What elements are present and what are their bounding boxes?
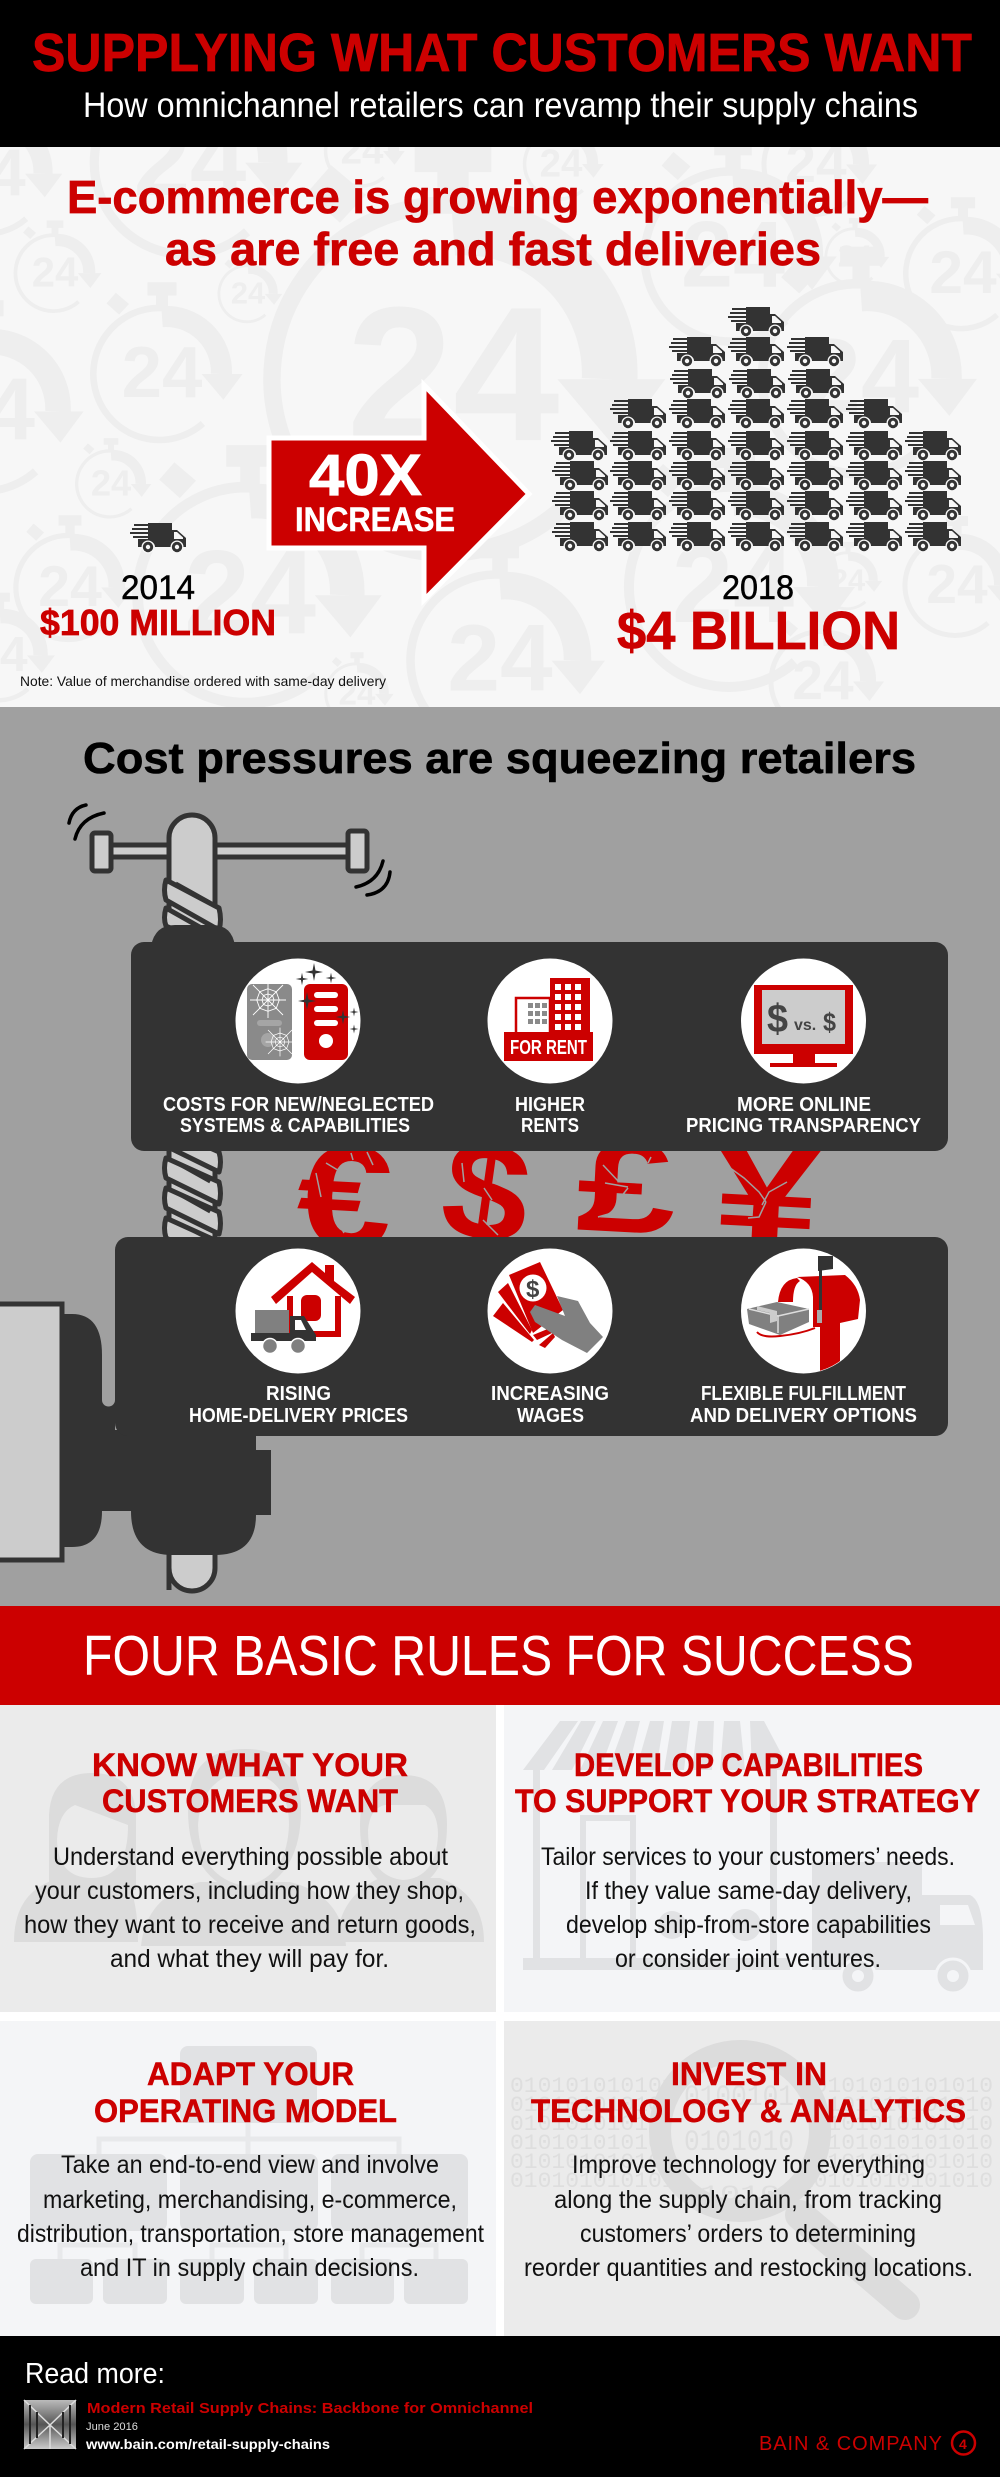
background: binary and magnifier: 01010101010101010101010101010101010 — [510, 2093, 993, 2118]
body: reorder quantities and restocking locations. — [524, 2254, 973, 2282]
icon: crushed currency symbols: ¥ — [709, 1113, 824, 1276]
body: Take an end-to-end view and involve — [61, 2151, 439, 2179]
logo: Bain & Company: BAIN & COMPANY — [759, 2433, 942, 2455]
panel: know your customers — [0, 1705, 496, 2012]
icon: old and new systems — [236, 958, 360, 1084]
background: binary and magnifier — [510, 2051, 993, 2305]
heading: CUSTOMERS WANT — [102, 1783, 398, 1819]
header band — [0, 0, 1000, 147]
arrow: 40X increase: 40X — [309, 443, 422, 508]
background stopwatch pattern: 24 — [122, 332, 202, 413]
labels: PRICING TRANSPARENCY — [686, 1115, 922, 1137]
background stopwatch pattern: 24 — [785, 132, 847, 194]
labels — [163, 1094, 922, 1137]
icon: crushed currency symbols — [297, 1151, 821, 1237]
body — [24, 1843, 476, 1973]
background stopwatch pattern: 24 — [929, 238, 997, 306]
panel: e-commerce growth — [0, 147, 1000, 707]
background stopwatch pattern: 24 — [540, 142, 583, 185]
background stopwatch pattern: 24 — [831, 563, 865, 598]
body: along the supply chain, from tracking — [554, 2186, 942, 2214]
body: your customers, including how they shop, — [35, 1877, 464, 1905]
heading: INVEST IN — [671, 2056, 827, 2092]
labels — [189, 1383, 917, 1427]
heading: KNOW WHAT YOUR — [92, 1747, 408, 1783]
background stopwatch pattern: 24 — [681, 201, 785, 306]
background stopwatch pattern: 24 — [231, 276, 265, 311]
labels: SYSTEMS & CAPABILITIES — [180, 1115, 410, 1137]
icon: price comparison monitor: $ — [767, 997, 788, 1041]
read more: Read more: — [25, 2358, 165, 2390]
background stopwatch pattern: 24 — [347, 267, 559, 481]
labels: MORE ONLINE — [737, 1094, 871, 1116]
icon: wages cash in hand — [488, 1248, 612, 1374]
panel: upper jaw — [131, 942, 948, 1151]
body: and IT in supply chain decisions. — [80, 2254, 419, 2282]
background stopwatch pattern: 24 — [803, 318, 919, 435]
background: storefront and truck — [523, 1721, 983, 1993]
background stopwatch pattern: 24 — [792, 649, 854, 711]
labels: RENTS — [521, 1115, 579, 1137]
heading: TO SUPPORT YOUR STRATEGY — [515, 1783, 980, 1819]
footer — [0, 2336, 1000, 2477]
icon: crushed currency symbols: £ — [573, 1112, 680, 1263]
body: customers’ orders to determining — [580, 2220, 916, 2248]
heading — [67, 171, 928, 275]
icon: wages cash in hand: $ — [526, 1276, 540, 1303]
report reference: www.bain.com/retail-supply-chains — [85, 2436, 330, 2452]
background stopwatch pattern: 24 — [184, 526, 316, 659]
logo: Bain & Company: 4 — [959, 2436, 967, 2452]
background stopwatch pattern: 24 — [672, 523, 794, 646]
body: or consider joint ventures. — [615, 1945, 881, 1973]
thumbnail: warehouse aisle — [24, 2400, 76, 2449]
icon: crushed currency symbols: $ — [433, 1108, 540, 1275]
panel: cost pressures — [0, 707, 1000, 1606]
labels: AND DELIVERY OPTIONS — [690, 1405, 917, 1427]
background: people — [14, 1749, 484, 1946]
background stopwatch pattern: 24 — [134, 104, 246, 217]
vise body — [0, 925, 271, 1560]
heading: E-commerce is growing exponentially— — [67, 171, 928, 223]
icon: price comparison monitor: vs. — [794, 1017, 816, 1034]
2018 value: 2018 — [722, 569, 794, 607]
body — [524, 2151, 973, 2282]
body: Improve technology for everything — [572, 2151, 925, 2179]
body: and what they will pay for. — [110, 1945, 389, 1973]
background: binary and magnifier: 01010101010101010101010101010101010 — [510, 2112, 993, 2137]
labels: FLEXIBLE FULFILLMENT — [701, 1383, 906, 1405]
heading: DEVELOP CAPABILITIES — [574, 1747, 923, 1783]
truck grid 2018 — [551, 307, 961, 552]
labels: RISING — [266, 1383, 331, 1405]
labels: HOME-DELIVERY PRICES — [189, 1405, 408, 1427]
report reference: June 2016 — [86, 2421, 138, 2433]
background: binary and magnifier: 0100101 — [684, 2081, 794, 2115]
icon: price comparison monitor — [741, 958, 866, 1084]
icon: mailbox with parcel — [741, 1248, 866, 1380]
note: Note: Value of merchandise ordered with same-day delivery — [20, 673, 386, 689]
panel: lower jaw — [115, 1237, 948, 1436]
background stopwatch pattern: 24 — [91, 463, 131, 504]
background stopwatch pattern: 24 — [339, 674, 376, 711]
report reference: Modern Retail Supply Chains: Backbone for Omnichannel — [87, 2400, 533, 2417]
background: binary and magnifier: 01010101010101010101010101010101010 — [510, 2074, 993, 2099]
labels: COSTS FOR NEW/NEGLECTED — [163, 1094, 434, 1116]
labels: WAGES — [517, 1405, 584, 1427]
heading: OPERATING MODEL — [94, 2093, 397, 2129]
heading: TECHNOLOGY & ANALYTICS — [531, 2093, 966, 2129]
report reference — [85, 2400, 533, 2452]
background stopwatch pattern: 24 — [341, 129, 384, 172]
heading — [531, 2056, 966, 2129]
body: distribution, transportation, store management — [17, 2220, 484, 2248]
body — [541, 1843, 955, 1973]
background stopwatch pattern: 24 — [38, 555, 102, 619]
background stopwatch pattern: 24 — [32, 248, 79, 295]
heading — [94, 2056, 397, 2129]
labels: INCREASING — [491, 1383, 609, 1405]
heading: ADAPT YOUR — [147, 2056, 354, 2092]
rules banner — [0, 1606, 1000, 1705]
labels: HIGHER — [515, 1094, 585, 1116]
heading: as are free and fast deliveries — [165, 223, 821, 275]
panel: invest in technology — [504, 2021, 1000, 2336]
background stopwatch pattern: 24 — [838, 239, 872, 274]
background: binary and magnifier: 01010101010101010101010101010101010 — [510, 2150, 993, 2175]
2018 value: $4 BILLION — [617, 601, 900, 661]
body: how they want to receive and return goods, — [24, 1911, 476, 1939]
2014 value: $100 MILLION — [40, 602, 276, 643]
body: develop ship-from-store capabilities — [566, 1911, 931, 1939]
2014 value: 2014 — [121, 569, 195, 607]
heading — [515, 1747, 980, 1819]
background: binary and magnifier: 0101010 — [684, 2126, 794, 2160]
body — [17, 2151, 484, 2282]
vise screw and handle — [69, 805, 390, 1591]
icon: crushed currency symbols: € — [293, 1113, 396, 1280]
icon: home delivery — [236, 1248, 360, 1374]
background stopwatch pattern: 24 — [447, 606, 553, 712]
body: marketing, merchandising, e-commerce, — [43, 2186, 457, 2214]
body: If they value same-day delivery, — [585, 1877, 912, 1905]
panel: adapt operating model — [0, 2021, 496, 2336]
2014 value — [40, 569, 276, 643]
body: Understand everything possible about — [53, 1843, 448, 1871]
body: Tailor services to your customers’ needs. — [541, 1843, 955, 1871]
icon: for rent building — [488, 958, 612, 1084]
background stopwatch pattern — [0, 35, 1000, 747]
panel: develop capabilities — [504, 1705, 1000, 2012]
background: binary and magnifier: 01010101010101010101010101010101010 — [510, 2169, 993, 2194]
heading — [92, 1747, 408, 1819]
icon: price comparison monitor: $ — [823, 1007, 836, 1037]
background: org chart — [30, 2046, 468, 2304]
background stopwatch pattern: 24 — [926, 553, 988, 615]
subtitle: How omnichannel retailers can revamp their supply chains — [83, 86, 918, 125]
heading: Cost pressures are squeezing retailers — [83, 734, 916, 783]
2018 value — [617, 569, 900, 661]
arrow: 40X increase — [269, 385, 529, 600]
icon: single truck 2014 — [130, 523, 186, 554]
background: binary and magnifier: 1010 — [700, 2182, 780, 2207]
background: binary and magnifier: 01010101010101010101010101010101010 — [510, 2131, 993, 2156]
arrow: 40X increase: INCREASE — [295, 501, 455, 539]
icon: for rent building: FOR RENT — [510, 1037, 587, 1059]
